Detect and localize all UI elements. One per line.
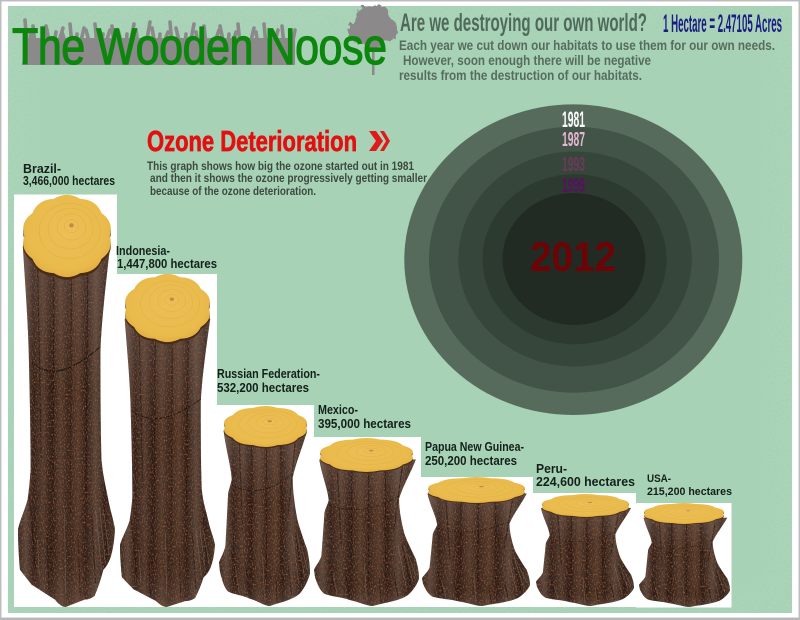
icon: grass silhouette bbox=[22, 20, 295, 65]
heading: are we destroying our own world: Are we destroying our own world? bbox=[400, 9, 647, 37]
ring 1981 bbox=[404, 104, 742, 415]
intro text bbox=[399, 38, 775, 83]
stump: Peru bbox=[533, 493, 636, 607]
label: Russian Federation: 532,200 hectares bbox=[217, 381, 309, 395]
ring 2012 bbox=[502, 193, 646, 325]
label: Indonesia: Indonesia- bbox=[116, 244, 170, 258]
stump: Brazil bbox=[14, 194, 117, 607]
label: Peru: Peru- bbox=[536, 462, 567, 476]
label 1999: 1999 bbox=[562, 175, 585, 197]
intro text: However, soon enough there will be negative bbox=[403, 53, 651, 68]
label: Peru: 224,600 hectares bbox=[536, 475, 635, 489]
ring 1999 bbox=[482, 174, 666, 344]
ozone description text: because of the ozone deterioration. bbox=[150, 186, 316, 198]
label: Indonesia bbox=[116, 244, 217, 271]
label: Brazil: 3,466,000 hectares bbox=[23, 174, 115, 188]
label 1993: 1993 bbox=[562, 154, 585, 176]
ring 1993 bbox=[458, 152, 692, 366]
stump: Mexico bbox=[314, 437, 421, 607]
label: Mexico: Mexico- bbox=[318, 403, 358, 417]
label: Papua New Guinea: 250,200 hectares bbox=[425, 454, 517, 468]
ozone description text: This graph shows how big the ozone started out in 1981 bbox=[147, 161, 415, 173]
label 1987: 1987 bbox=[562, 129, 585, 151]
stump: USA bbox=[636, 503, 732, 608]
stump: Papua New Guinea bbox=[421, 477, 533, 607]
label: Papua New Guinea bbox=[425, 440, 524, 468]
label: USA: 215,200 hectares bbox=[647, 486, 732, 498]
label: USA bbox=[647, 473, 732, 498]
label: Russian Federation bbox=[217, 367, 320, 395]
label: Mexico bbox=[318, 403, 411, 431]
icon: tree silhouette bbox=[348, 6, 398, 75]
icon: double chevron arrow bbox=[369, 131, 390, 151]
heading: ozone deterioration: Ozone Deterioration bbox=[147, 126, 357, 158]
label 2012: 2012 bbox=[530, 233, 616, 280]
label: Brazil bbox=[23, 162, 115, 188]
ozone description text: and then it shows the ozone progressively getting smaller bbox=[150, 173, 427, 185]
label: Brazil: Brazil- bbox=[23, 162, 61, 176]
title: The Wooden Noose bbox=[12, 18, 387, 75]
label: Papua New Guinea: Papua New Guinea- bbox=[425, 440, 524, 454]
chart: ozone shrinking concentric circles bbox=[404, 104, 742, 415]
label: Peru bbox=[536, 462, 635, 489]
intro text: results from the destruction of our habitats. bbox=[399, 68, 642, 83]
stump: Russian Federation bbox=[217, 405, 314, 607]
label: Russian Federation: Russian Federation- bbox=[217, 367, 320, 381]
label: USA: USA- bbox=[647, 473, 671, 485]
label: Mexico: 395,000 hectares bbox=[318, 417, 411, 431]
ring 1987 bbox=[429, 127, 719, 393]
ozone description text bbox=[147, 161, 427, 198]
stump: Indonesia bbox=[117, 274, 217, 607]
label: Indonesia: 1,447,800 hectares bbox=[117, 257, 217, 271]
chart: ozone shrinking concentric circles: 1981 bbox=[562, 107, 585, 132]
